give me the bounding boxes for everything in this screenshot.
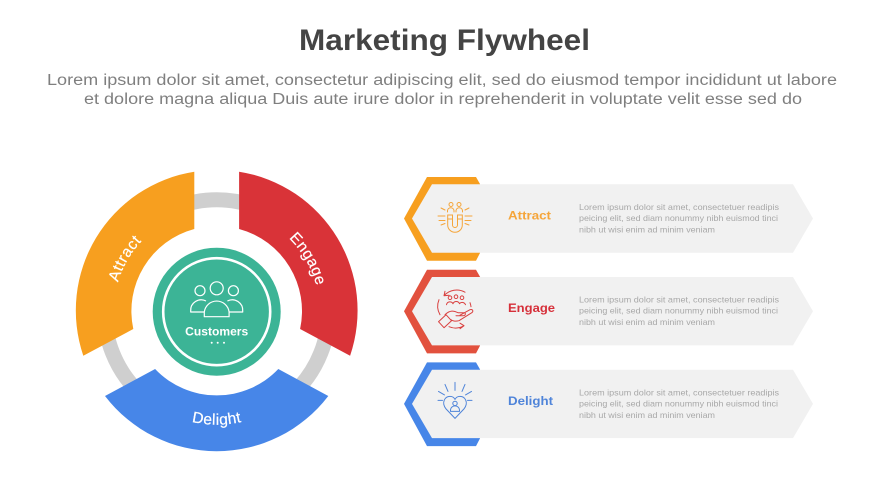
subtitle: Lorem ipsum dolor sit amet, consectetur adipiscing elit, sed do eiusmod tempor incididunt ut labore [47,72,837,89]
label: Customers: Customers [185,326,248,338]
hexagon frame [404,270,480,353]
segment: Engage [239,172,358,356]
description [579,387,779,420]
label: Attract: Attract [508,208,551,222]
arrow panel [412,370,813,438]
description [579,295,779,327]
description: Lorem ipsum dolor sit amet, consectetuer readipis [579,295,779,305]
segment: Attract [76,172,194,356]
description [579,202,779,234]
description: Lorem ipsum dolor sit amet, consectetuer readipis [579,387,779,397]
description: nibh ut wisi enim ad minim veniam [579,224,715,234]
row: Engage [404,270,813,353]
label: Delight: Delight [508,394,553,408]
icon: hand with people [438,290,473,329]
description: Lorem ipsum dolor sit amet, consectetuer readipis [579,202,779,212]
segment: Engage: Engage [290,232,324,284]
row: Attract [404,177,813,261]
segment: Attract: Attract [109,236,142,282]
dots [211,342,225,344]
row: Delight [404,362,813,446]
description: peicing elit, sed diam nonummy nibh euismod tinci [579,306,778,316]
icon: heart with person [438,382,472,418]
arrow panel [412,184,813,253]
label: Engage: Engage [508,301,555,315]
subtitle [47,72,837,108]
segment: Delight [105,369,328,452]
icon: magnet [438,202,472,232]
description: peicing elit, sed diam nonummy nibh euismod tinci [579,398,778,408]
flywheel diagram [76,172,358,452]
description: nibh ut wisi enim ad minim veniam [579,317,715,327]
arrow panel [412,277,813,345]
center hub: Customers [153,248,281,376]
description: nibh ut wisi enim ad minim veniam [579,410,715,420]
title: Marketing Flywheel [299,24,590,57]
hexagon frame [404,362,480,446]
subtitle: et dolore magna aliqua Duis aute irure dolor in reprehenderit in voluptate velit esse sed do [84,91,802,108]
hexagon frame [404,177,480,261]
icon: customers group [191,282,243,317]
description: peicing elit, sed diam nonummy nibh euismod tinci [579,213,778,223]
segment: Delight: Delight [192,412,242,428]
